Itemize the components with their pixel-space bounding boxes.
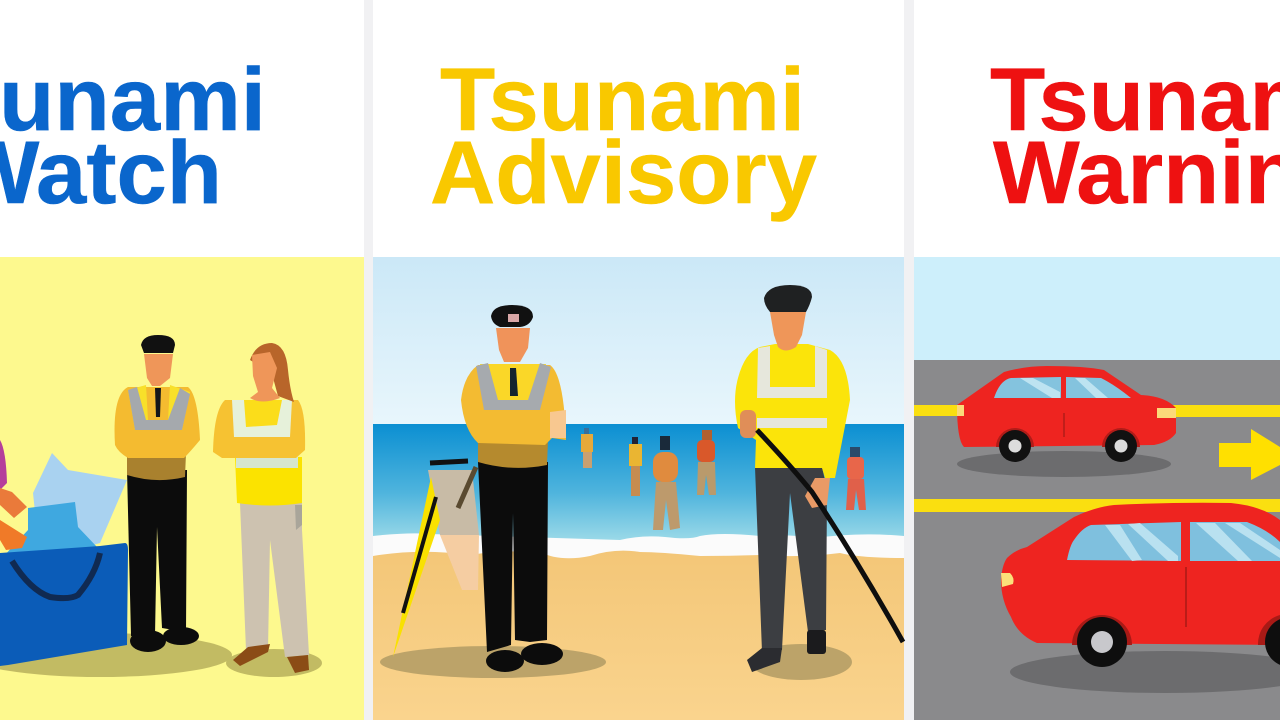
heading: Tsunami Advisory: Tsunami	[440, 49, 805, 149]
sand	[373, 548, 904, 720]
distant people on beach	[581, 428, 866, 530]
ground shadows	[0, 633, 322, 677]
icon: packed emergency bag	[0, 440, 128, 666]
foam	[373, 533, 904, 558]
car: red top	[957, 366, 1176, 462]
car shadows	[957, 451, 1280, 693]
heading: Tsunami Warning	[990, 49, 1280, 222]
panel: warning scene	[914, 257, 1280, 720]
hose	[757, 430, 903, 642]
sea	[373, 424, 904, 549]
figure: officer with hose	[735, 285, 850, 672]
ground shadows	[380, 644, 852, 680]
road lines	[914, 405, 1280, 512]
car: red bottom	[1001, 503, 1280, 667]
figure: woman in vest	[213, 343, 309, 673]
road	[914, 360, 1280, 720]
sign stand	[393, 461, 479, 657]
heading: Tsunami Advisory: Advisory	[430, 122, 818, 222]
arrow	[1219, 429, 1280, 480]
panel: watch scene	[0, 257, 364, 720]
figure: officer on beach	[461, 305, 566, 672]
heading: Tsunami Advisory	[430, 49, 818, 222]
panel: advisory scene	[373, 257, 904, 720]
figure: officer in uniform	[115, 335, 200, 652]
heading: Tsunami Watch	[0, 49, 266, 222]
